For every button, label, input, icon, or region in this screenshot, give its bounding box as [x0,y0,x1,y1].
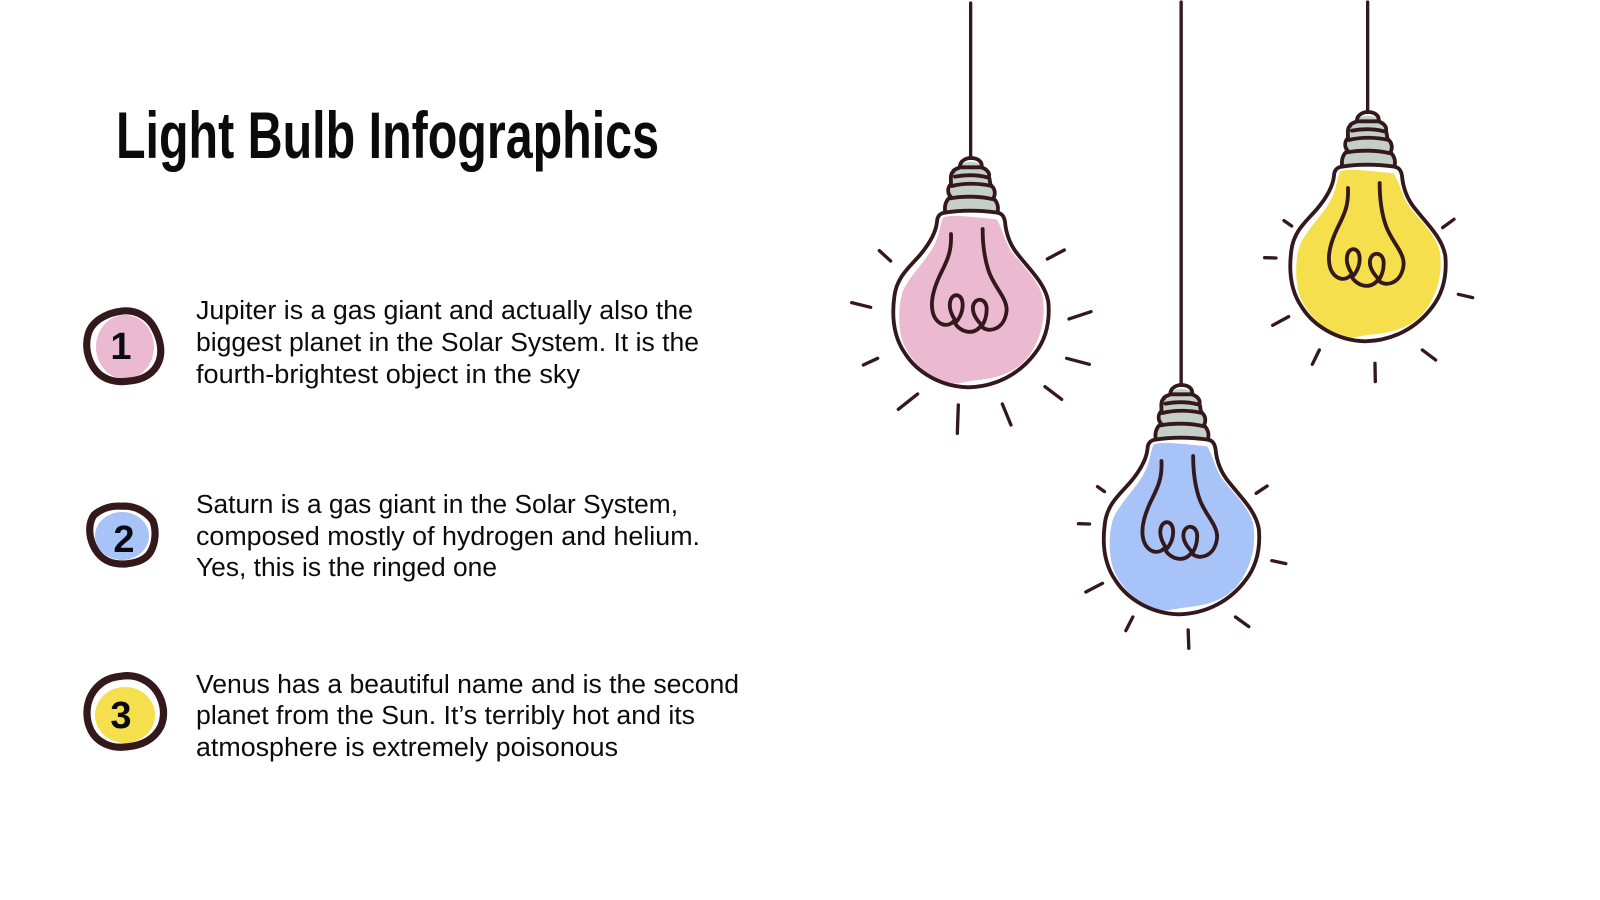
socket [1342,112,1395,167]
rays [852,250,1091,433]
item 1 [87,297,699,389]
glass outline [1290,165,1446,341]
glass fill [1296,170,1441,338]
rays [1265,219,1473,382]
text 2: Yes, this is the ringed one [196,554,497,582]
rays [1078,486,1286,648]
text 3 [196,671,739,762]
badge 3 [87,676,164,747]
badge 1: 1 [110,326,132,368]
text 3: atmosphere is extremely poisonous [196,734,618,762]
cord [1363,2,1373,112]
title: Light Bulb Infographics [116,98,659,172]
text 1 [196,297,699,389]
glass fill [1110,443,1254,611]
filament [1142,456,1217,559]
text 3: planet from the Sun. It’s terribly hot and its [196,702,695,730]
text 3: Venus has a beautiful name and is the second [196,671,739,699]
filament [932,229,1007,332]
glass outline [893,211,1049,387]
yellow bulb [1265,2,1473,382]
item 2 [90,491,700,582]
glass fill [899,216,1044,384]
socket [945,158,998,213]
text 1: Jupiter is a gas giant and actually also the [196,297,693,325]
filament [1329,183,1404,286]
badge 2: 2 [113,519,135,561]
badge 2 [90,506,155,564]
text 2: composed mostly of hydrogen and helium. [196,523,700,551]
text 2 [196,491,700,582]
badge 1 [87,311,161,382]
text 1: fourth-brightest object in the sky [196,361,580,389]
text 1: biggest planet in the Solar System. It is the [196,329,699,357]
cord [1176,2,1186,385]
cord [966,3,976,158]
item 3 [87,671,739,762]
socket [1155,385,1208,440]
blue bulb [1078,2,1286,648]
badge 3: 3 [110,695,132,737]
text 2: Saturn is a gas giant in the Solar System, [196,491,678,519]
pink bulb [852,3,1091,433]
glass outline [1104,438,1259,614]
